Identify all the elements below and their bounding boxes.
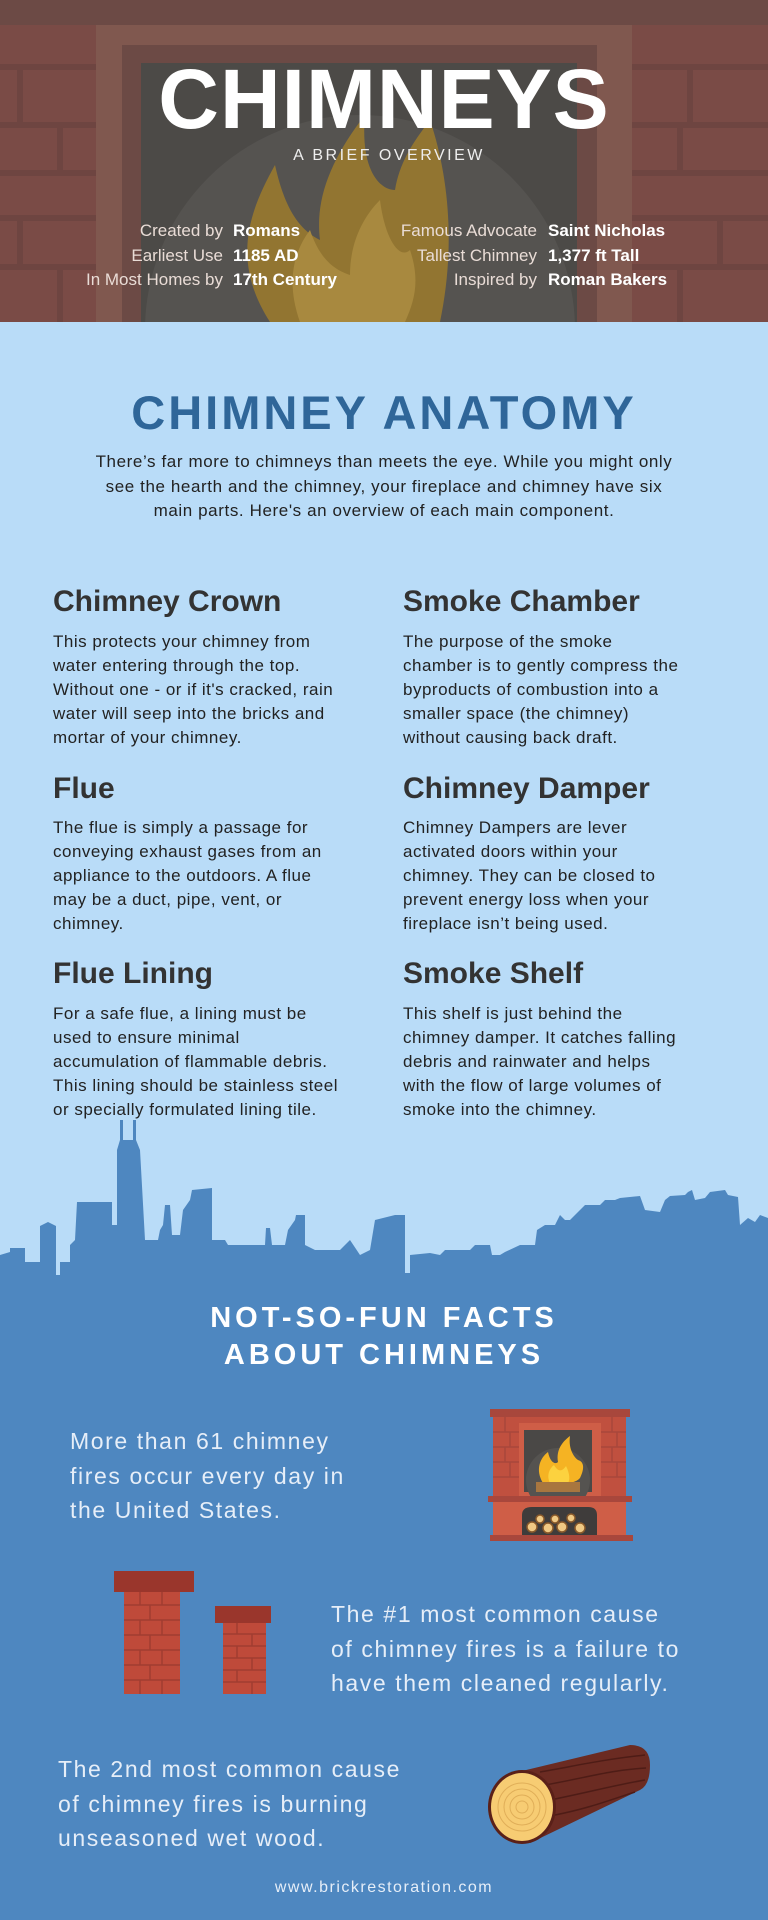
stats left labels <box>86 221 223 289</box>
intro paragraph: see the hearth and the chimney, your fireplace and chimney have six <box>106 476 662 496</box>
title: CHIMNEYS <box>158 52 610 146</box>
subtitle: A BRIEF OVERVIEW <box>293 147 485 164</box>
section: smoke chamber <box>403 585 678 747</box>
skyline and facts background <box>0 1120 768 1920</box>
fact 2 text: of chimney fires is a failure to <box>331 1636 680 1662</box>
text: Chimney Dampers are lever <box>403 818 627 837</box>
text: used to ensure minimal <box>53 1028 240 1047</box>
text: smaller space (the chimney) <box>403 704 629 723</box>
stats right labels: Tallest Chimney <box>417 246 537 264</box>
text: This lining should be stainless steel <box>53 1076 338 1095</box>
text <box>403 1004 676 1119</box>
intro paragraph: main parts. Here's an overview of each main component. <box>154 501 614 520</box>
text <box>53 632 333 747</box>
footer url: www.brickrestoration.com <box>275 1879 493 1896</box>
stats right labels: Famous Advocate <box>401 221 537 240</box>
text <box>403 632 678 747</box>
section: flue <box>53 772 322 933</box>
fact 2 text: The #1 most common cause <box>331 1601 660 1627</box>
stats right values: 1,377 ft Tall <box>548 246 639 264</box>
section: chimney crown <box>53 585 333 747</box>
text: This shelf is just behind the <box>403 1004 623 1023</box>
fact 3 text: The 2nd most common cause <box>58 1756 401 1782</box>
fact 2 text: have them cleaned regularly. <box>331 1670 669 1696</box>
stats left values <box>233 221 337 289</box>
intro paragraph <box>96 452 672 520</box>
text: fireplace isn’t being used. <box>403 914 608 933</box>
fact 1 text: the United States. <box>70 1497 282 1523</box>
intro paragraph: There’s far more to chimneys than meets the eye. While you might only <box>96 452 672 471</box>
heading: chimney anatomy: CHIMNEY ANATOMY <box>131 386 637 439</box>
heading: Flue Lining <box>53 957 213 990</box>
stats left values: Romans <box>233 221 300 240</box>
stats right labels <box>401 221 537 289</box>
text: chamber is to gently compress the <box>403 656 678 675</box>
stats right values: Roman Bakers <box>548 270 667 289</box>
heading: Smoke Chamber <box>403 585 640 618</box>
stats right values <box>548 221 667 289</box>
stats left labels: Created by <box>140 221 223 240</box>
fact 1 text: fires occur every day in <box>70 1462 345 1488</box>
heading: not-so-fun facts <box>210 1302 558 1371</box>
icon: fireplace <box>488 1409 633 1541</box>
stats left values: 17th Century <box>233 270 337 289</box>
fact 2 text <box>331 1601 680 1696</box>
text: Without one - or if it's cracked, rain <box>53 680 333 699</box>
text: without causing back draft. <box>403 728 618 747</box>
text: prevent energy loss when your <box>403 890 649 909</box>
icon: chimneys <box>114 1571 271 1694</box>
fact 3 text <box>58 1756 401 1851</box>
text: appliance to the outdoors. A flue <box>53 866 311 885</box>
text: smoke into the chimney. <box>403 1100 597 1119</box>
text: with the flow of large volumes of <box>403 1076 661 1095</box>
heading: not-so-fun facts: NOT-SO-FUN FACTS <box>210 1302 558 1334</box>
heading: not-so-fun facts: ABOUT CHIMNEYS <box>224 1339 544 1371</box>
heading: Smoke Shelf <box>403 957 583 990</box>
text: activated doors within your <box>403 842 618 861</box>
text: This protects your chimney from <box>53 632 310 651</box>
header: fireplace background <box>0 0 768 322</box>
text: byproducts of combustion into a <box>403 680 659 699</box>
stats left labels: In Most Homes by <box>86 270 223 289</box>
text: mortar of your chimney. <box>53 728 242 747</box>
text <box>403 818 656 933</box>
stats right labels: Inspired by <box>454 270 537 289</box>
text: chimney. <box>53 914 124 933</box>
text: debris and rainwater and helps <box>403 1052 650 1071</box>
fact 3 text: unseasoned wet wood. <box>58 1825 325 1851</box>
text: The purpose of the smoke <box>403 632 613 651</box>
heading: Flue <box>53 772 115 805</box>
heading: Chimney Damper <box>403 772 650 805</box>
text <box>53 1004 338 1119</box>
text: water entering through the top. <box>53 656 300 675</box>
text <box>53 818 322 933</box>
stats right values: Saint Nicholas <box>548 221 665 240</box>
section: smoke shelf <box>403 957 676 1119</box>
fact 1 text: More than 61 chimney <box>70 1428 330 1454</box>
text: accumulation of flammable debris. <box>53 1052 327 1071</box>
text: chimney. They can be closed to <box>403 866 656 885</box>
fact 1 text <box>70 1428 345 1523</box>
fact 3 text: of chimney fires is burning <box>58 1790 368 1816</box>
icon: log <box>488 1745 650 1844</box>
text: conveying exhaust gases from an <box>53 842 322 861</box>
heading: Chimney Crown <box>53 585 281 618</box>
text: chimney damper. It catches falling <box>403 1028 676 1047</box>
section: chimney damper <box>403 772 656 933</box>
text: or specially formulated lining tile. <box>53 1100 317 1119</box>
stats left labels: Earliest Use <box>131 246 223 264</box>
text: may be a duct, pipe, vent, or <box>53 890 282 909</box>
text: For a safe flue, a lining must be <box>53 1004 307 1023</box>
text: The flue is simply a passage for <box>53 818 308 837</box>
stats left values: 1185 AD <box>233 246 299 264</box>
section: flue lining <box>53 957 338 1119</box>
text: water will seep into the bricks and <box>53 704 325 723</box>
